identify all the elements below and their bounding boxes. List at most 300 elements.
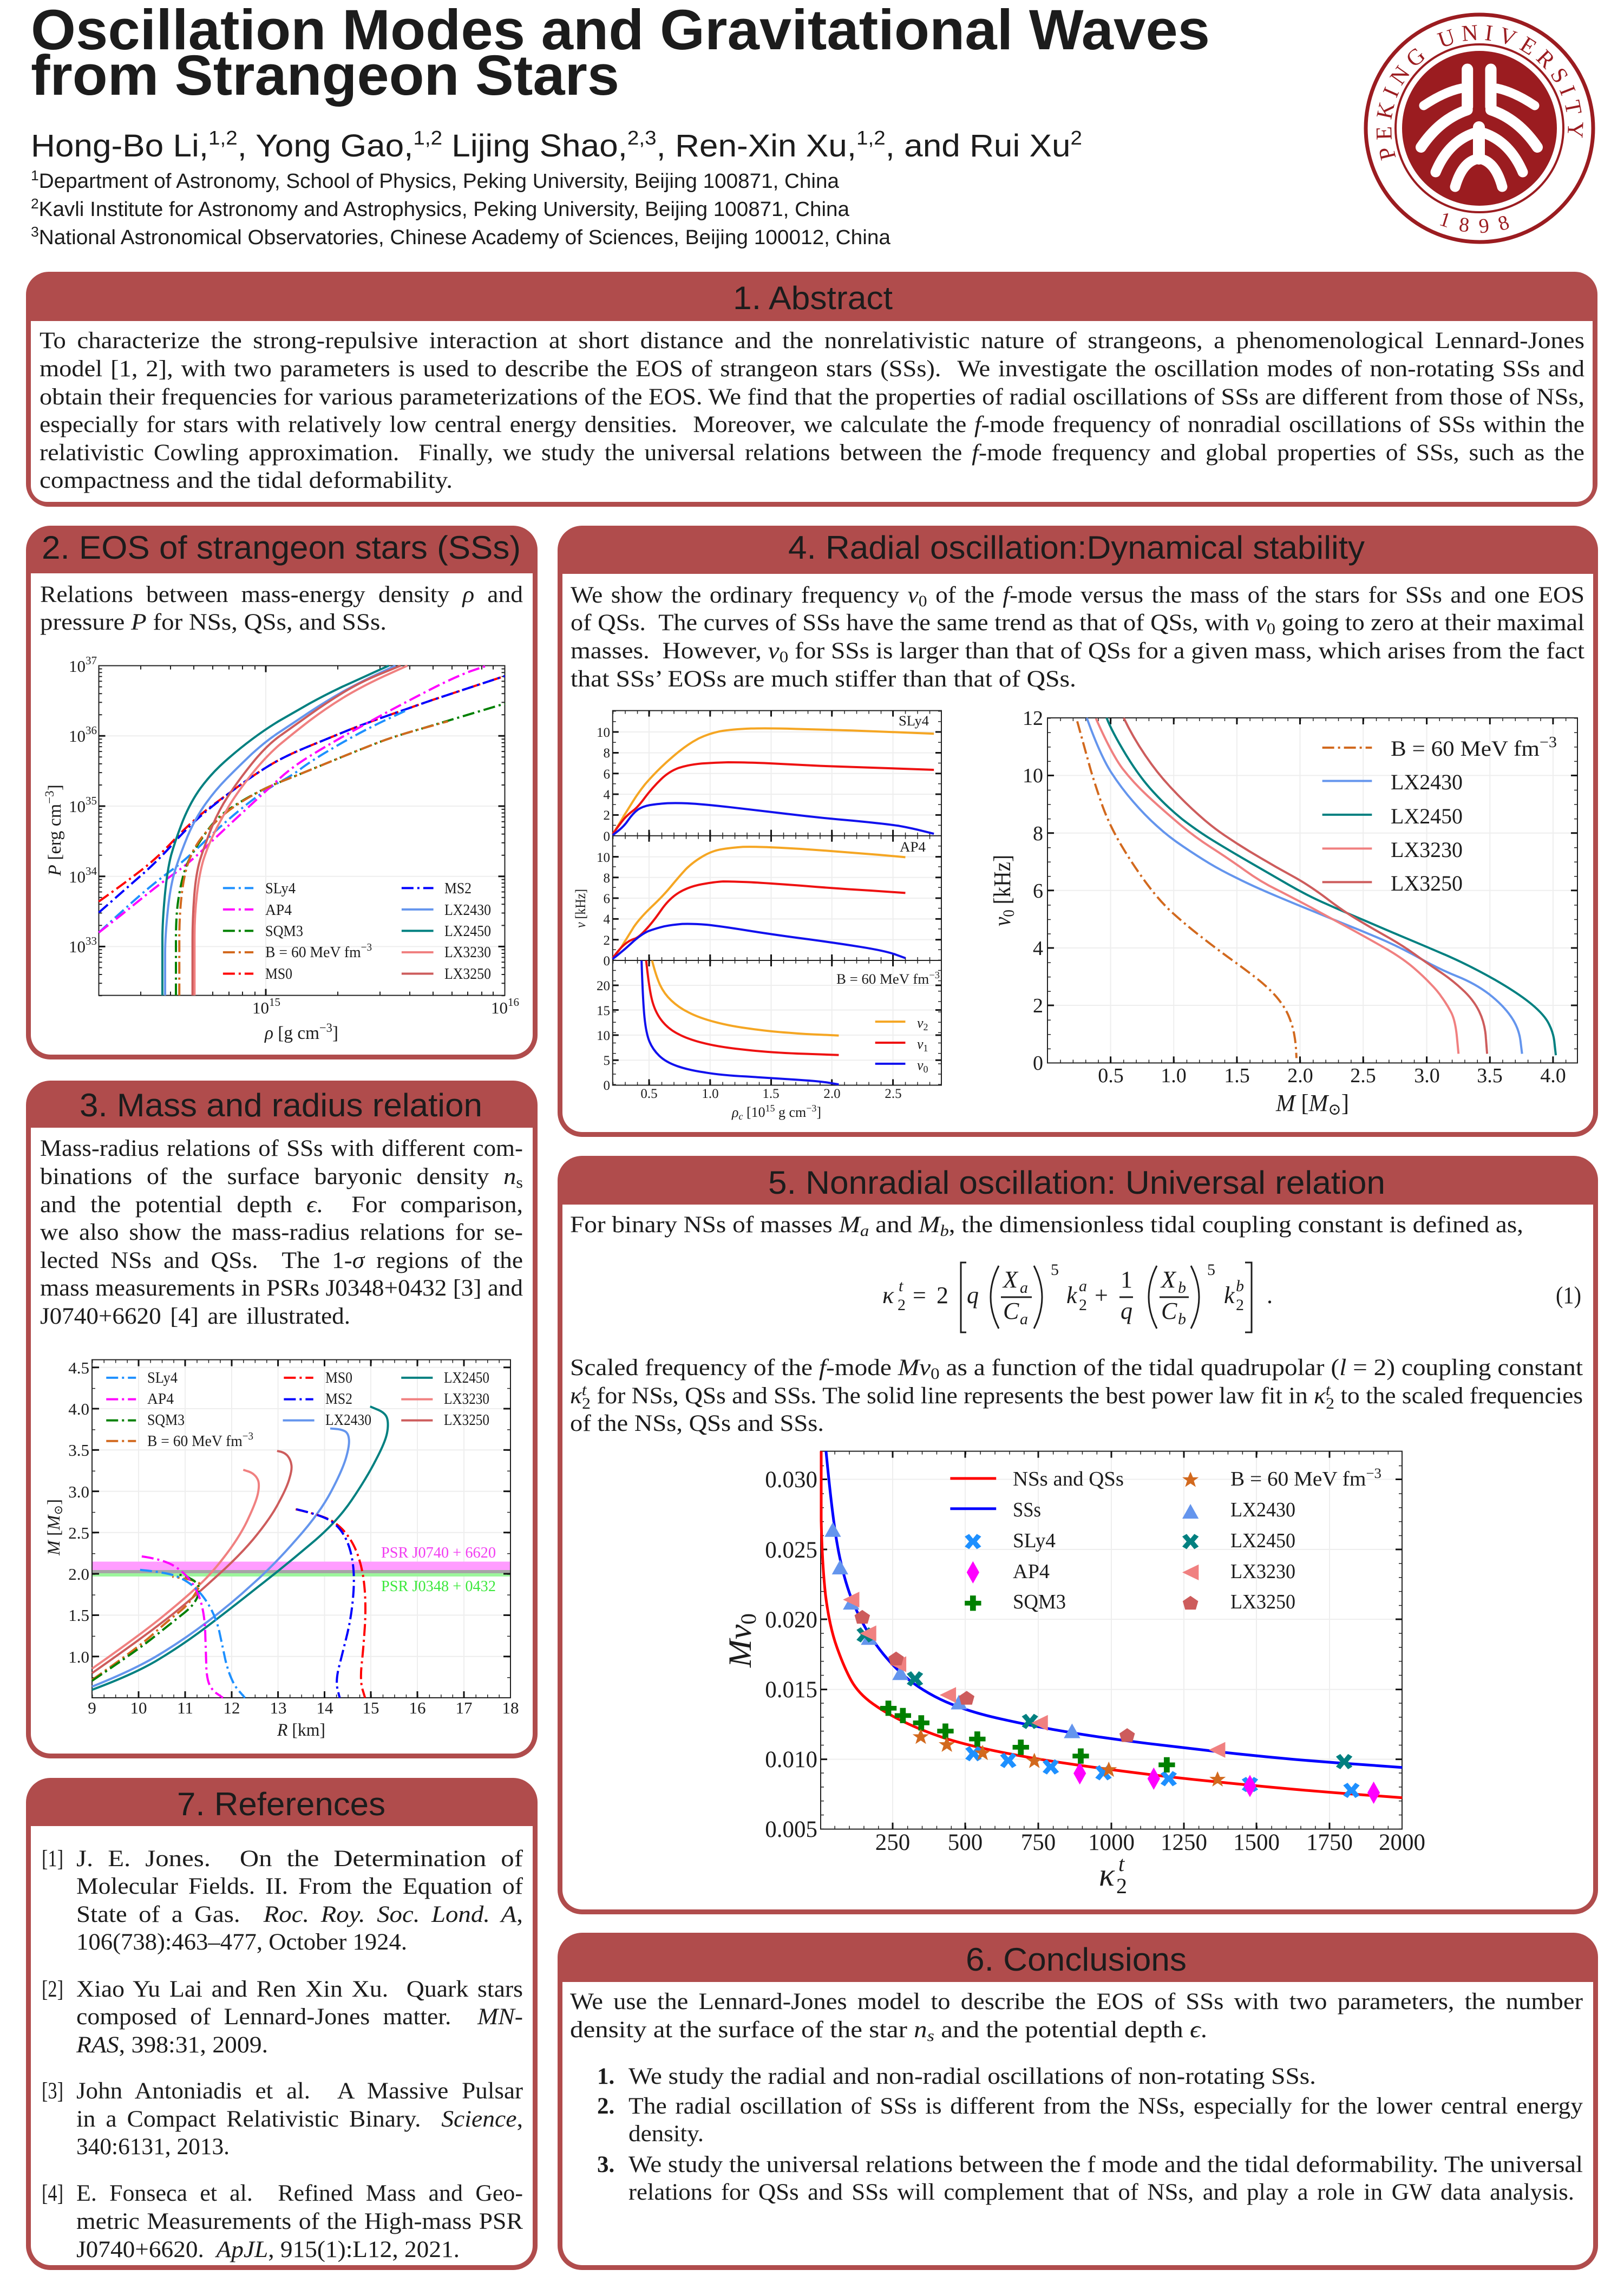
- chart: mass vs radius: 16: [409, 1698, 425, 1717]
- chart: radial mode frequencies vs central density: ]: [816, 1104, 821, 1120]
- panel: radial oscillation: [558, 526, 1598, 1137]
- legend labels: AP4: [265, 901, 292, 919]
- chart: radial mode frequencies vs central density: 8: [603, 746, 610, 761]
- band: PSR J0348+0432: [92, 1570, 510, 1577]
- affiliations: 2: [31, 195, 39, 212]
- chart: radial mode frequencies vs central density: ν [kHz]: [573, 889, 588, 928]
- authors: Hong-Bo Li,: [31, 128, 197, 163]
- equation 1: .: [1267, 1282, 1273, 1309]
- legend labels: [1391, 734, 1557, 895]
- list: conclusions: We study the universal relations between the f mode and the tidal deformability. The universal: [628, 2152, 1583, 2177]
- text: scaled frequency description: t: [1326, 1381, 1331, 1399]
- chart: universal relation: 2000: [1379, 1830, 1425, 1855]
- legend labels: −3: [1540, 734, 1557, 751]
- chart: mass vs radius: 14: [316, 1698, 333, 1717]
- list: conclusions: [597, 2064, 1583, 2205]
- chart: nu0 vs mass: ν: [989, 917, 1016, 926]
- text: scaled frequency description: [570, 1355, 1583, 1436]
- text: scaled frequency description: for NSs, QSs and SSs. The solid line represents the best power law fit in: [591, 1383, 1314, 1409]
- text: scaled frequency description: κ: [570, 1383, 582, 1409]
- chart: mass vs radius: M [M: [44, 1515, 64, 1555]
- chart: universal relation: Mν: [722, 1624, 758, 1668]
- text: mass-radius intro: s: [516, 1174, 523, 1192]
- text: mass-radius intro: [40, 1136, 523, 1329]
- text: abstract body: To characterize the strong-repulsive interaction at short distance and the nonrelativistic nature of strangeons, a phenomenological Lennard-Jones: [40, 328, 1584, 354]
- chart: mass vs radius: 13: [270, 1698, 287, 1717]
- legend labels: AP4: [1013, 1560, 1050, 1583]
- equation 1: a: [1020, 1310, 1028, 1328]
- chart: nu0 vs mass: 4: [1033, 937, 1043, 960]
- markers: AP4: [967, 1561, 1380, 1804]
- legend and sub-panel labels: B = 60 MeV fm: [836, 971, 926, 987]
- list: conclusions: The radial oscillation of SSs is different from the NSs, especially for the lower central energy: [628, 2094, 1583, 2119]
- chart: pressure vs density: 16: [508, 996, 519, 1009]
- markers: SQM3: [880, 1595, 1175, 1772]
- legend and sub-panel labels: 2: [924, 1022, 928, 1032]
- text: conclusions intro: We use the Lennard-Jones model to describe the EOS of SSs with two parameters, the number: [570, 1989, 1583, 2014]
- reference 4: [4]: [42, 2181, 63, 2206]
- authors: Lijing Shao,: [442, 128, 627, 163]
- legend labels: SQM3: [1013, 1591, 1066, 1613]
- reference 3: 340:6131, 2013.: [76, 2134, 230, 2160]
- text: conclusions intro: ϵ.: [1190, 2017, 1207, 2043]
- chart: nu0 vs mass: 8: [1033, 822, 1043, 845]
- reference 4: metric Measurements of the High-mass PSR: [76, 2209, 523, 2234]
- chart: nu0 vs mass: ⊙: [1328, 1101, 1341, 1118]
- text: tidal coupling intro: For binary NSs of masses M: [570, 1212, 858, 1238]
- text: scaled frequency description: 0: [931, 1365, 940, 1383]
- legend labels: [147, 1369, 489, 1450]
- chart: universal relation: t: [1118, 1852, 1125, 1876]
- chart: pressure vs density: 10: [69, 727, 86, 745]
- authors: 1,2: [413, 127, 442, 149]
- legend labels: LX2430: [1230, 1499, 1295, 1521]
- heading: EOS: 2. EOS of strangeon stars (SSs): [42, 529, 521, 566]
- legend and sub-panel labels: [836, 713, 940, 1075]
- chart: radial mode frequencies vs central density: 15: [765, 1103, 775, 1114]
- chart: pressure vs density: 10: [69, 797, 86, 816]
- reference 4: [42, 2181, 523, 2262]
- chart: pressure vs density: 15: [269, 996, 280, 1009]
- chart: radial mode frequencies vs central density: 15: [597, 1004, 610, 1018]
- reference 1: [42, 1846, 523, 1955]
- chart: radial mode frequencies vs central density: [10: [743, 1104, 765, 1120]
- legend labels: SLy4: [265, 880, 296, 897]
- text: radial oscillation intro: [571, 583, 1584, 692]
- panel: abstract: [26, 272, 1597, 507]
- chart: mass vs radius: ]: [44, 1499, 64, 1505]
- chart: radial mode frequencies vs central density: 2: [603, 808, 610, 823]
- chart: universal relation: 1000: [1088, 1830, 1135, 1855]
- chart: mass vs radius: 11: [177, 1698, 193, 1717]
- text: radial oscillation intro: going to zero at their maximal: [1275, 610, 1584, 636]
- chart: radial mode frequencies vs central density: 0: [603, 829, 610, 844]
- reference 2: Xiao Yu Lai and Ren Xin Xu. Quark stars: [76, 1977, 523, 2002]
- text: mass-radius intro: Mass-radius relations of SSs with different com-: [40, 1136, 523, 1161]
- equation 1: t: [899, 1277, 903, 1295]
- title: from Strangeon Stars: [31, 44, 619, 107]
- chart: pressure vs density: −3: [319, 1021, 332, 1035]
- affiliations: Kavli Institute for Astronomy and Astrophysics, Peking University, Beijing 100871, China: [39, 198, 850, 221]
- chart: nu0 vs mass: 1.5: [1224, 1064, 1250, 1087]
- legend labels: B = 60 MeV fm: [265, 944, 365, 961]
- legend swatches: [223, 888, 434, 974]
- equation 1: =: [913, 1282, 926, 1309]
- legend labels: MS2: [325, 1390, 352, 1408]
- chart: mass vs radius: 2.5: [68, 1523, 89, 1542]
- chart: radial mode frequencies vs central density: 5: [603, 1054, 610, 1068]
- chart: radial mode frequencies vs central density: 1.0: [702, 1087, 719, 1101]
- legend and sub-panel labels: SLy4: [899, 713, 929, 729]
- chart: pressure vs density: 34: [86, 865, 97, 878]
- chart: universal relation: [722, 1451, 1425, 1898]
- chart: pressure vs density: [43, 654, 519, 1043]
- equation 1: [882, 1261, 1581, 1332]
- list: conclusions: 2.: [597, 2094, 614, 2119]
- legend labels: B = 60 MeV fm: [147, 1432, 247, 1450]
- legend labels: −3: [1366, 1466, 1381, 1481]
- reference 2: [42, 1977, 523, 2058]
- affiliations: [31, 167, 891, 249]
- chart: nu0 vs mass: 1.0: [1161, 1064, 1187, 1087]
- chart: nu0 vs mass: 0: [1033, 1052, 1043, 1075]
- chart: nu0 vs mass: 3.0: [1414, 1064, 1440, 1087]
- text: radial oscillation intro: that SSs’ EOSs are much stiffer than that of QSs.: [571, 666, 1076, 692]
- text: radial oscillation intro: for SSs is larger than that of QSs for a given mass, which arises from the fact: [788, 638, 1584, 664]
- chart: mass vs radius: R [km]: [277, 1721, 325, 1740]
- chart: mass vs radius: 1.0: [68, 1647, 89, 1666]
- chart: universal relation: 2: [1116, 1874, 1127, 1898]
- affiliations: 1: [31, 167, 39, 184]
- authors: 2,3: [627, 127, 657, 149]
- equation 1: 2: [1079, 1296, 1087, 1314]
- legend labels: SLy4: [147, 1369, 178, 1386]
- text: abstract body: [40, 328, 1584, 493]
- text: radial oscillation intro: We show the ordinary frequency ν: [571, 583, 918, 608]
- text: scaled frequency description: to the scaled frequencies: [1334, 1383, 1583, 1409]
- text: tidal coupling intro: , the dimensionless tidal coupling constant is defined as,: [949, 1212, 1523, 1238]
- chart: mass vs radius: 10: [130, 1698, 147, 1717]
- equation 1: b: [1236, 1277, 1244, 1295]
- chart: universal relation: 0.010: [765, 1747, 817, 1772]
- chart: mass vs radius: 3.5: [68, 1441, 89, 1460]
- markers: SLy4: [965, 1534, 1360, 1798]
- equation 1: C: [1003, 1298, 1019, 1324]
- label: PSR J0740+6620: PSR J0740 + 6620: [381, 1544, 496, 1561]
- reference 1: [1]: [42, 1846, 63, 1872]
- chart: radial mode frequencies vs central density: 0: [603, 954, 610, 969]
- chart: pressure vs density: 36: [86, 724, 97, 737]
- chart: nu0 vs mass: ]: [1341, 1090, 1349, 1116]
- text: conclusions intro: density at the surface of the star n: [570, 2017, 926, 2043]
- legend and sub-panel labels: ν: [917, 1057, 924, 1073]
- reference 3: [42, 2078, 523, 2160]
- legend labels: [265, 880, 491, 983]
- legend labels: LX3230: [1391, 838, 1463, 862]
- heading: nonradial oscillation: 5. Nonradial oscillation: Universal relation: [768, 1165, 1385, 1201]
- legend labels: MS0: [325, 1369, 352, 1386]
- text: scaled frequency description: κ: [1314, 1383, 1326, 1409]
- text: abstract body: model [1, 2], with two parameters is used to describe the EOS of strangeon stars (SSs). We investigate the oscillation modes of non-rotating SSs and: [40, 356, 1584, 382]
- chart: nu0 vs mass: 12: [1023, 707, 1043, 730]
- text: abstract body: especially for stars with relatively low central energy densities. Moreover, we calculate the f-mode frequency of nonradial oscillations of SSs within the: [40, 412, 1584, 437]
- legend labels: MS2: [444, 880, 472, 897]
- reference 2: RAS, 398:31, 2009.: [76, 2032, 268, 2058]
- chart: mass vs radius: ⊙: [51, 1505, 65, 1515]
- legend swatches: [875, 1022, 905, 1064]
- text: mass-radius intro: mass measurements in PSRs J0348+0432 [3] and: [40, 1275, 523, 1301]
- chart: nu0 vs mass: [kHz]: [989, 855, 1016, 910]
- chart: radial mode frequencies vs central density: 20: [597, 979, 610, 993]
- equation 1: κ: [882, 1282, 894, 1309]
- equation 1: (1): [1556, 1282, 1581, 1309]
- equation 1: +: [1095, 1282, 1108, 1309]
- legend and sub-panel labels: AP4: [900, 839, 926, 855]
- equation 1: 1: [1121, 1266, 1132, 1293]
- legend labels: LX2450: [1391, 804, 1463, 828]
- legend labels: LX2450: [444, 923, 491, 940]
- chart: universal relation: 0.020: [765, 1607, 817, 1633]
- text: tidal coupling intro: a: [860, 1222, 869, 1240]
- reference 3: [3]: [42, 2078, 63, 2104]
- title: [31, 0, 1210, 107]
- equation 1: 5: [1051, 1261, 1059, 1279]
- chart: radial mode frequencies vs central density: 4: [603, 788, 611, 802]
- chart: radial mode frequencies vs central density: 2.0: [823, 1087, 841, 1101]
- chart: universal relation: 0.015: [765, 1677, 817, 1703]
- text: radial oscillation intro: f-mode versus the mass of the stars for SSs and one EOS: [1003, 583, 1555, 608]
- equation 1: 5: [1207, 1261, 1215, 1279]
- text: EOS intro: pressure P for NSs, QSs, and SSs.: [40, 610, 387, 635]
- panel: references: [26, 1778, 538, 2270]
- authors: , Ren-Xin Xu,: [657, 128, 856, 163]
- equation 1: b: [1178, 1279, 1186, 1297]
- reference 1: State of a Gas. Roc. Roy. Soc. Lond. A ,: [76, 1902, 523, 1927]
- chart: nu0 vs mass: 0.5: [1098, 1064, 1124, 1087]
- icon: Peking University logo: PEKING UNIVERSITY: [1376, 25, 1583, 161]
- equation 1: X: [1160, 1266, 1177, 1293]
- chart: mass vs radius: 4.5: [68, 1358, 89, 1377]
- text: radial oscillation intro: of the: [927, 583, 1003, 608]
- band: PSR J0740+6620: [92, 1561, 510, 1573]
- markers: LX2430: [824, 1504, 1199, 1738]
- authors: 1,2: [856, 127, 886, 149]
- legend labels: B = 60 MeV fm: [1391, 736, 1529, 761]
- equation 1: X: [1002, 1266, 1019, 1293]
- chart: mass vs radius: [44, 1358, 519, 1740]
- chart: nu0 vs mass: 3.5: [1477, 1064, 1503, 1087]
- affiliations: National Astronomical Observatories, Chinese Academy of Sciences, Beijing 100012, China: [39, 226, 891, 249]
- legend labels: −3: [361, 941, 372, 953]
- chart: universal relation: 500: [948, 1830, 983, 1855]
- text: tidal coupling intro: M: [918, 1212, 941, 1238]
- chart: mass vs radius: 4.0: [68, 1399, 89, 1418]
- legend labels: SSs: [1013, 1499, 1041, 1521]
- list: conclusions: We study the radial and non-radial oscillations of non-rotating SSs.: [628, 2064, 1316, 2089]
- chart: pressure vs density: 10: [491, 998, 508, 1017]
- legend swatches: [106, 1378, 433, 1441]
- chart: radial mode frequencies vs central density: 10: [597, 725, 610, 740]
- chart: radial mode frequencies vs central density: 2.5: [885, 1087, 902, 1101]
- chart: universal relation: 1250: [1161, 1830, 1207, 1855]
- legend labels: SLy4: [1013, 1529, 1056, 1552]
- chart: radial mode frequencies vs central density: 4: [603, 912, 611, 927]
- chart: nu0 vs mass: 2.0: [1287, 1064, 1313, 1087]
- legend labels: LX3230: [444, 944, 491, 961]
- chart: radial mode frequencies vs central density: 2: [603, 933, 610, 948]
- chart: nu0 vs mass: 2.5: [1350, 1064, 1376, 1087]
- reference 3: John Antoniadis et al. A Massive Pulsar: [76, 2078, 523, 2104]
- legend and sub-panel labels: 1: [924, 1043, 928, 1054]
- chart: mass vs radius: 3.0: [68, 1482, 89, 1501]
- legend labels: SQM3: [265, 923, 303, 940]
- heading: conclusions: 6. Conclusions: [966, 1941, 1187, 1978]
- chart: mass vs radius: 12: [223, 1698, 240, 1717]
- reference 1: 106(738):463–477, October 1924.: [76, 1929, 407, 1955]
- legend labels: LX2430: [444, 901, 491, 919]
- text: radial oscillation intro: 0: [1267, 620, 1275, 638]
- chart: mass vs radius: 1.5: [68, 1606, 89, 1625]
- text: mass-radius intro: and the potential depth ϵ. For comparison,: [40, 1192, 523, 1218]
- chart: universal relation: 750: [1021, 1830, 1056, 1855]
- equation 1: k: [1224, 1282, 1235, 1309]
- reference 1: J. E. Jones. On the Determination of: [76, 1846, 523, 1872]
- text: tidal coupling intro: b: [940, 1222, 949, 1240]
- authors: 2: [1071, 127, 1082, 149]
- legend labels: LX2430: [325, 1411, 371, 1429]
- chart: nu0 vs mass: 2: [1033, 995, 1043, 1017]
- legend labels: LX2450: [1230, 1529, 1295, 1552]
- affiliations: Department of Astronomy, School of Physics, Peking University, Beijing 100871, China: [39, 170, 840, 193]
- legend labels: SQM3: [147, 1411, 185, 1429]
- chart: nu0 vs mass: M [M: [1276, 1090, 1328, 1116]
- equation 1: 2: [898, 1296, 906, 1314]
- legend labels: LX3250: [444, 965, 491, 983]
- panel: EOS of strangeon stars: [26, 526, 538, 1059]
- affiliations: 3: [31, 224, 39, 240]
- equation 1: b: [1178, 1310, 1186, 1328]
- reference 1: Molecular Fields. II. From the Equation of: [76, 1874, 523, 1899]
- chart: radial mode frequencies vs central density: 0.5: [640, 1087, 658, 1101]
- chart: radial mode frequencies vs central density: [573, 711, 941, 1122]
- chart: universal relation: 0.030: [765, 1467, 817, 1493]
- panel: nonradial oscillation: [558, 1156, 1598, 1914]
- text: mass-radius intro: binations of the surface baryonic density n: [40, 1164, 515, 1189]
- legend labels: LX3250: [1391, 871, 1463, 895]
- chart: pressure vs density: 35: [86, 794, 97, 807]
- chart: pressure vs density: 10: [252, 998, 269, 1017]
- text: mass-radius intro: J0740+6620 [4] are illustrated.: [40, 1304, 350, 1329]
- text: scaled frequency description: t: [582, 1381, 587, 1399]
- text: radial oscillation intro: 0: [780, 648, 788, 666]
- authors: , Yong Gao,: [238, 128, 413, 163]
- list: conclusions: 3.: [597, 2152, 614, 2177]
- text: conclusions intro: [570, 1989, 1583, 2045]
- list: conclusions: relations for QSs and SSs will complement that of NSs, and play a role in GW data analysis.: [628, 2180, 1574, 2205]
- list: conclusions: 1.: [597, 2064, 614, 2089]
- chart: universal relation: 0: [736, 1613, 761, 1625]
- markers: LX3250: [855, 1596, 1198, 1742]
- chart: universal relation: 0.005: [765, 1817, 817, 1842]
- chart: radial mode frequencies vs central density: 10: [597, 1029, 610, 1043]
- chart: mass vs radius: 2.0: [68, 1565, 89, 1584]
- text: scaled frequency description: Scaled frequency of the f-mode Mν: [570, 1355, 928, 1381]
- chart: pressure vs density: −3: [43, 790, 56, 804]
- equation 1: k: [1066, 1282, 1078, 1309]
- heading: abstract: 1. Abstract: [733, 280, 893, 316]
- chart: universal relation: 0.025: [765, 1538, 817, 1563]
- chart: radial mode frequencies vs central density: 10: [597, 851, 610, 865]
- chart: universal relation: 250: [875, 1830, 910, 1855]
- legend labels: LX2430: [1391, 770, 1463, 794]
- reference 4: E. Fonseca et al. Refined Mass and Geo-: [76, 2181, 523, 2206]
- icon: Peking University logo: 1898: [1440, 213, 1509, 233]
- markers: LX3230: [843, 1565, 1225, 1758]
- equation 1: 2: [1236, 1296, 1244, 1314]
- equation 1: q: [967, 1282, 979, 1309]
- chart: radial mode frequencies vs central density: ρ: [731, 1104, 738, 1120]
- legend and sub-panel labels: ν: [917, 1036, 924, 1052]
- chart: pressure vs density: 10: [69, 657, 86, 676]
- legend and sub-panel labels: −3: [929, 970, 940, 980]
- text: scaled frequency description: 2: [582, 1395, 591, 1412]
- legend labels: [1013, 1466, 1381, 1613]
- chart: pressure vs density: 33: [86, 934, 97, 947]
- label: PSR J0348+0432: PSR J0348 + 0432: [381, 1578, 496, 1595]
- chart: nu0 vs mass: 6: [1033, 880, 1043, 902]
- chart: radial mode frequencies vs central density: 6: [603, 892, 610, 906]
- chart: nu0 vs mass: 10: [1023, 764, 1043, 787]
- chart: mass vs radius: 18: [502, 1698, 519, 1717]
- text: radial oscillation intro: masses. However, ν: [571, 638, 778, 664]
- panel: conclusions: [558, 1933, 1598, 2270]
- text: abstract body: obtain their frequencies for various parameterizations of the EOS. We find that the properties of radial oscillations of SSs are different from those of NSs,: [40, 384, 1584, 410]
- chart: radial mode frequencies vs central density: −3: [806, 1103, 816, 1114]
- legend labels: LX3230: [444, 1390, 489, 1408]
- equation 1: q: [1121, 1298, 1132, 1324]
- legend labels: LX3250: [1230, 1591, 1295, 1613]
- legend labels: MS0: [265, 965, 292, 983]
- chart: nu0 vs mass: [989, 707, 1577, 1118]
- authors: , and Rui Xu: [886, 128, 1071, 163]
- chart: radial mode frequencies vs central density: c: [738, 1111, 743, 1122]
- heading: radial oscillation: 4. Radial oscillation:Dynamical stability: [788, 529, 1365, 566]
- legend and sub-panel labels: 0: [924, 1064, 928, 1075]
- text: conclusions intro: and the potential depth: [934, 2017, 1190, 2043]
- text: scaled frequency description: 2: [1326, 1395, 1334, 1412]
- chart: pressure vs density: 10: [69, 867, 86, 886]
- list: conclusions: density.: [628, 2121, 704, 2147]
- text: scaled frequency description: l = 2) coupling constant: [1339, 1355, 1561, 1381]
- text: EOS intro: [40, 582, 523, 635]
- legend labels: LX3230: [1230, 1560, 1295, 1583]
- chart: universal relation: κ: [1099, 1857, 1115, 1893]
- equation 1: a: [1079, 1277, 1087, 1295]
- reference 3: in a Compact Relativistic Binary. Science,: [76, 2107, 523, 2132]
- legend labels: AP4: [147, 1390, 174, 1408]
- legend labels: −3: [243, 1430, 253, 1442]
- panel: mass and radius relation: [26, 1081, 538, 1758]
- text: scaled frequency description: of the NSs, QSs and SSs.: [570, 1411, 824, 1436]
- markers: LX2450: [856, 1534, 1352, 1769]
- chart: radial mode frequencies vs central density: 6: [603, 767, 610, 782]
- text: radial oscillation intro: 0: [919, 592, 927, 610]
- chart: pressure vs density: ]: [332, 1023, 338, 1043]
- text: conclusions intro: s: [927, 2027, 934, 2045]
- text: scaled frequency description: as a function of the tidal quadrupolar (: [940, 1355, 1339, 1381]
- legend labels: LX2450: [444, 1369, 489, 1386]
- chart: mass vs radius: 15: [363, 1698, 379, 1717]
